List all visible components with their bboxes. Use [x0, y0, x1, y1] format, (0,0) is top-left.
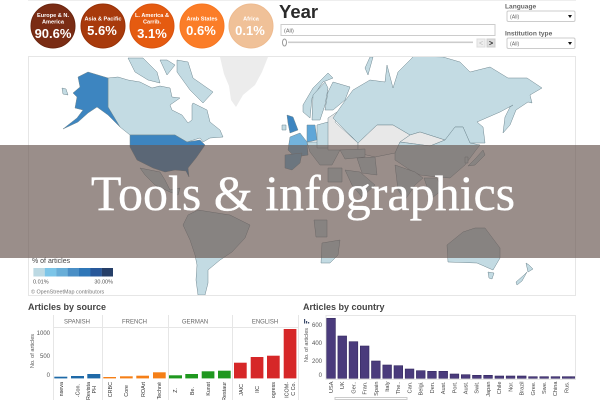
country labels: Rus.	[564, 381, 570, 393]
map legend: % of articles	[32, 258, 71, 265]
country labels: Ger..	[352, 381, 358, 394]
source labels: ROArt	[141, 382, 147, 397]
mongolia	[400, 132, 445, 146]
circle: Europe & N. America: Europe & N.	[37, 13, 69, 19]
finland	[325, 82, 350, 110]
circle: Asia & Pacific: 5.6%	[87, 23, 117, 38]
articles by source heading: Articles by source	[28, 302, 106, 312]
year heading: Year	[279, 1, 318, 22]
germany	[307, 125, 317, 142]
iran	[357, 157, 377, 175]
country labels: Aust.	[464, 381, 470, 394]
country labels: Nor.	[508, 381, 514, 392]
arabia	[345, 170, 375, 197]
world map panel	[28, 56, 576, 296]
italy and balkans	[307, 142, 340, 165]
title: Tools & infographics	[91, 165, 515, 221]
angola	[314, 220, 327, 237]
southeast asia	[424, 178, 438, 198]
circle: Europe & N. America: 90.6%	[35, 26, 72, 41]
canadian arctic islands	[128, 58, 213, 103]
y axis: 1000	[37, 331, 51, 337]
facet headers: SPANISH	[64, 320, 90, 326]
iberia	[285, 153, 302, 170]
country labels: Swe.	[542, 381, 548, 394]
tasmania	[488, 272, 494, 279]
country labels: Japan	[486, 382, 492, 397]
belarus and ukraine	[328, 110, 358, 150]
facet headers: GERMAN	[182, 320, 208, 326]
map legend: 0.01%	[33, 280, 49, 286]
south america	[183, 210, 250, 295]
source labels: IIC	[255, 386, 261, 393]
source labels: nseva	[59, 382, 65, 396]
german bars	[169, 371, 231, 378]
sweden	[312, 82, 328, 120]
south africa	[321, 240, 340, 263]
bar chart: articles by source	[30, 315, 298, 400]
y axis: No. of articles	[30, 334, 36, 368]
french bars	[103, 372, 166, 378]
united kingdom	[287, 115, 298, 133]
y axis: 400	[312, 341, 323, 347]
institution type filter	[505, 30, 575, 48]
country labels: Brazil	[520, 382, 526, 396]
map legend	[31, 258, 113, 296]
english bars	[234, 329, 296, 378]
articles by country heading: Articles by country	[303, 302, 385, 312]
circle: Asia & Pacific	[81, 4, 125, 48]
source labels: JAIC	[239, 384, 245, 396]
country labels: Fran.	[362, 381, 368, 395]
facet headers: FRENCH	[122, 320, 147, 326]
kazakhstan and central asia	[358, 125, 410, 157]
mexico and central america	[140, 168, 180, 195]
turkey	[340, 149, 365, 159]
greenland	[220, 57, 268, 107]
source labels: Be.	[190, 387, 196, 395]
korea	[465, 157, 468, 163]
circle: Europe & N. America	[31, 4, 75, 48]
russia	[333, 56, 542, 143]
country labels: Swit.	[474, 381, 480, 394]
country labels: Aust.	[441, 381, 447, 394]
circle: Arab States	[180, 4, 224, 48]
norway	[303, 73, 333, 118]
france	[288, 133, 308, 157]
spanish bars	[54, 374, 100, 378]
circle: L. America & Carib.: L. America &	[135, 13, 169, 19]
source labels	[59, 382, 297, 400]
map legend: © OpenStreetMap contributors	[31, 288, 104, 296]
country labels: Port.	[452, 381, 458, 393]
bars	[327, 318, 575, 378]
source labels: Z.	[173, 388, 179, 393]
japan	[468, 150, 485, 166]
circle: L. America & Carib.: 3.1%	[137, 26, 167, 41]
language filter: Language	[505, 4, 536, 10]
country labels: Spain	[374, 382, 380, 396]
bar chart: articles by country	[304, 316, 576, 400]
source labels: Techné	[157, 382, 163, 399]
new zealand	[516, 263, 533, 285]
country labels: UK	[340, 381, 346, 389]
contiguous usa	[130, 135, 205, 177]
circle: Africa	[229, 4, 273, 48]
facet headers: ENGLISH	[252, 320, 278, 326]
china	[395, 127, 480, 178]
year filter: (All)	[284, 28, 294, 34]
y axis: No. of articles	[304, 328, 310, 362]
source labels: CRBC	[108, 382, 114, 397]
y axis: 0	[319, 373, 323, 379]
y axis: 200	[312, 359, 323, 365]
circle: Asia & Pacific: Asia & Pacific	[84, 16, 122, 22]
source labels: Kunst	[206, 382, 212, 396]
y axis: 0	[47, 373, 51, 379]
circle: L. America & Carib.: Carrib.	[143, 20, 161, 26]
institution type filter: (All)	[510, 42, 519, 48]
slider buttons	[477, 39, 495, 48]
novaya zemlya	[365, 57, 373, 75]
map legend: 30.00%	[94, 280, 113, 286]
country labels: The..	[396, 381, 402, 394]
y axis: 500	[40, 354, 51, 360]
country labels: Italy	[385, 381, 391, 392]
slider buttons: >	[489, 40, 493, 48]
ireland	[282, 125, 286, 130]
country labels: Can.	[408, 381, 414, 393]
source labels: PH	[92, 386, 98, 394]
source labels: ogress	[271, 382, 277, 398]
country labels: Belgi.	[418, 381, 424, 396]
circle: Arab States: Arab States	[186, 16, 218, 22]
scrollbar	[335, 398, 407, 400]
canada	[108, 77, 223, 142]
country labels	[329, 381, 570, 397]
source labels: -Con.	[76, 384, 82, 397]
poland and central europe	[317, 122, 330, 148]
country labels: Gree.	[531, 381, 537, 396]
south asia	[395, 165, 423, 200]
country labels: Den.	[430, 381, 436, 393]
year filter	[279, 1, 495, 48]
sort icon	[304, 319, 309, 324]
bering island	[62, 88, 68, 95]
y axis	[304, 323, 323, 379]
source labels: Revista	[86, 382, 92, 400]
source labels: ICOM-	[284, 382, 290, 398]
y axis: 600	[312, 323, 323, 329]
region summary circles	[31, 4, 273, 48]
australia	[447, 228, 500, 270]
circle: Europe & N. America: America	[42, 20, 65, 26]
facet headers	[64, 320, 278, 326]
institution type filter: Institution type	[505, 30, 553, 38]
circle: Africa: 0.1%	[235, 23, 265, 38]
country labels: USA	[329, 381, 335, 393]
egypt	[328, 168, 342, 182]
language filter: (All)	[510, 14, 519, 20]
alaska	[63, 72, 120, 129]
country labels: Chile	[497, 382, 503, 394]
circle: Arab States: 0.6%	[186, 23, 216, 38]
language filter	[505, 4, 575, 22]
y axis	[30, 331, 51, 379]
slider buttons: <	[479, 40, 483, 48]
source labels: C Co.	[291, 382, 297, 396]
source labels: Core	[124, 385, 130, 397]
circle: L. America & Carib.	[130, 4, 174, 48]
country labels: China	[553, 381, 559, 396]
translucent title band	[0, 145, 600, 258]
circle: Africa: Africa	[243, 16, 260, 22]
